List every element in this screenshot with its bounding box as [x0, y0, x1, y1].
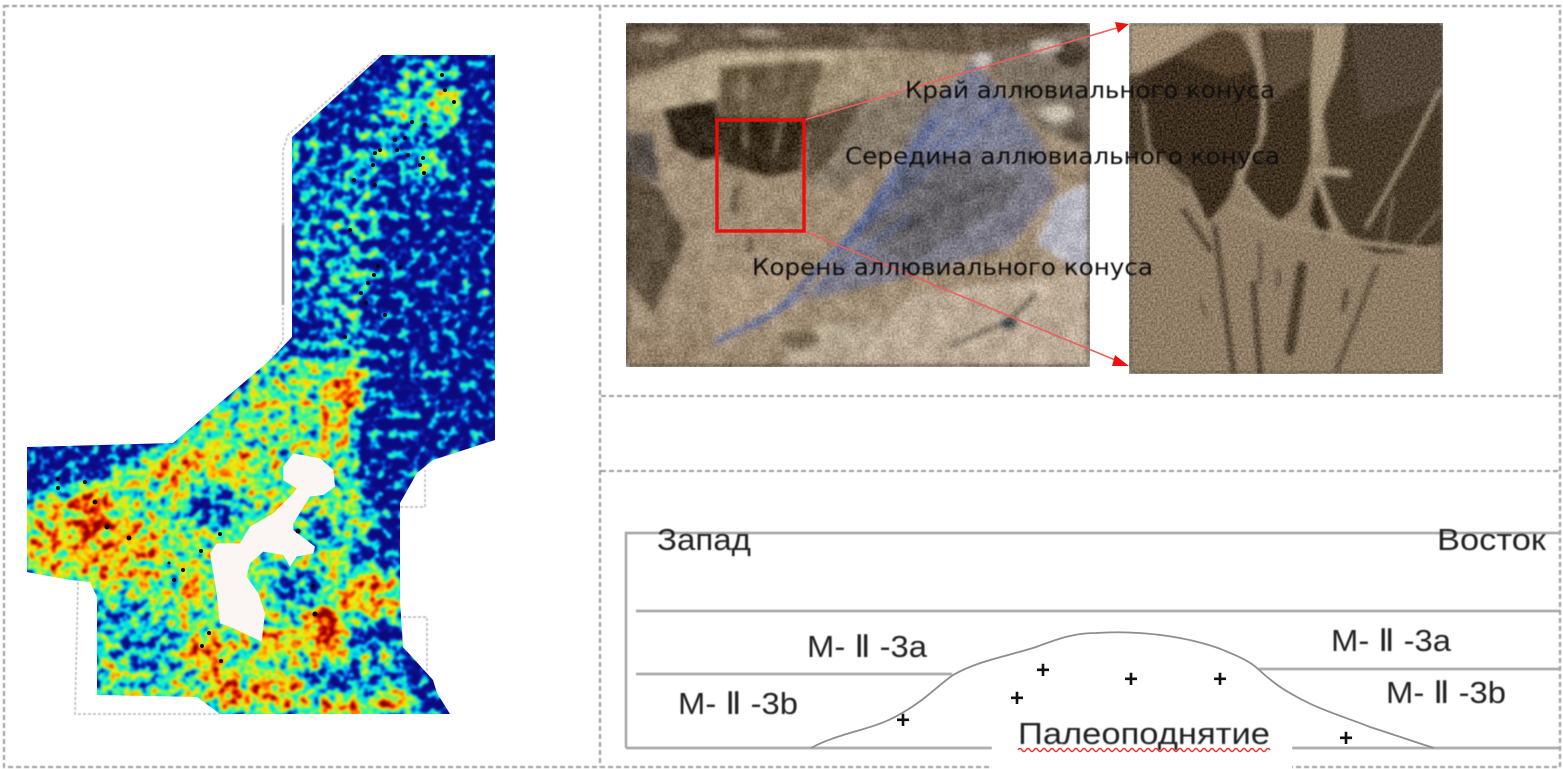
- plus markers: +: [1339, 725, 1353, 752]
- panel: enlarged photo: [1129, 23, 1443, 374]
- label: layer 3a east: M- Ⅱ -3a: [1331, 623, 1452, 658]
- heat map surface: [27, 55, 495, 714]
- plus markers: +: [896, 707, 910, 734]
- white gap under paleo-uplift: [992, 745, 1292, 769]
- label: west: Запад: [657, 522, 751, 557]
- section labels: [657, 522, 1546, 751]
- caption: fan middle: Середина аллювиального конуса: [845, 144, 1280, 170]
- panel: cross-section diagram: [626, 522, 1560, 769]
- wavy spellcheck underline: [1018, 748, 1270, 752]
- label: layer 3b east: M- Ⅱ -3b: [1386, 675, 1506, 710]
- callout: zoom lines and arrows: [804, 22, 1129, 366]
- caption: fan edge: Край аллювиального конуса: [905, 78, 1275, 104]
- plus markers: +: [1124, 666, 1138, 693]
- section strata lines: [626, 533, 1560, 748]
- plus markers: +: [1010, 685, 1024, 712]
- well markers: [56, 73, 456, 663]
- panel: satellite photo of alluvial fan: [625, 23, 1090, 367]
- label: east: Восток: [1437, 522, 1546, 557]
- paleo-uplift dome: [811, 632, 1434, 748]
- survey boundary outline: [75, 55, 427, 714]
- panel: heat map: [27, 54, 495, 716]
- plus markers: [896, 657, 1353, 752]
- label: layer 3b west: M- Ⅱ -3b: [678, 686, 798, 721]
- red selection box: [717, 120, 804, 231]
- label: paleo-uplift: Палеоподнятие: [1018, 716, 1270, 751]
- plus markers: +: [1036, 657, 1050, 684]
- photo captions: [752, 78, 1280, 281]
- label: layer 3a west: M- Ⅱ -3a: [807, 629, 928, 664]
- white hole in map: [210, 453, 335, 642]
- caption: fan root: Корень аллювиального конуса: [752, 255, 1153, 281]
- plus markers: +: [1213, 666, 1227, 693]
